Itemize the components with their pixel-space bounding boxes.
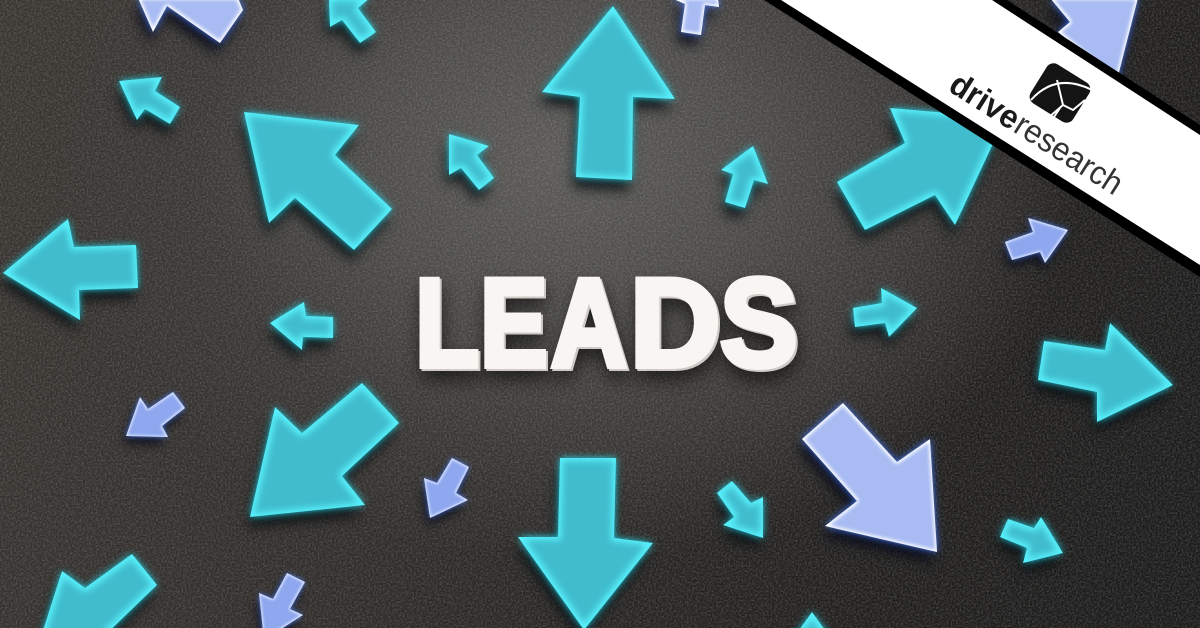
title: LEADS: A [551,254,627,393]
arrow: bottom-left cyan [40,554,157,628]
banner: drive research ribbon [764,0,1200,277]
title: LEADS: S [722,263,800,403]
title: LEADS: E [482,264,550,403]
title: LEADS: L [417,264,481,403]
arrow: top-left lavender [138,0,243,43]
arrow: small left cyan [270,302,333,350]
arrow: large right cyan [1038,323,1173,422]
logo wordmark [943,65,1130,202]
title: LEADS: A [553,264,629,403]
arrow: small right cyan [853,288,917,337]
title: LEADS: S [720,253,798,393]
title: LEADS: D [632,264,722,403]
arrow: top small lavender [671,0,719,35]
arrow: large left cyan [3,219,138,320]
arrow: small lower-right cyan [1000,517,1063,563]
title: LEADS: D [630,254,720,393]
arrow: small up-right lavender [1005,218,1068,263]
title: LEADS: S [722,255,800,395]
arrow: top-right lavender [1050,0,1138,80]
arrow: large up cyan [542,6,675,180]
arrow: small down-left lavender [126,392,185,437]
title: LEADS: E [482,256,550,395]
title: LEADS: L [417,256,481,395]
title: LEADS: L [415,254,479,393]
arrow: large down cyan [518,458,653,628]
title: LEADS [415,253,800,403]
arrow: top small cyan [329,0,376,43]
title: LEADS: E [480,254,548,393]
arrow: large down-left cyan [250,383,399,517]
title: LEADS: A [553,256,629,395]
logo wordmark: drive [943,65,1027,137]
logo icon [1027,60,1093,126]
arrow: bottom small lavender [259,573,305,628]
arrow: bottom edge cyan [792,612,832,628]
arrow: large up-left cyan [244,112,392,250]
arrow: centre small down-left lavender [424,458,469,518]
title: LEADS: D [632,256,722,395]
arrow: centre small up cyan [721,146,768,208]
logo wordmark: research [1008,106,1130,202]
arrow: large up-right cyan [837,108,1005,230]
arrow: small up-left cyan [119,77,180,124]
arrow: small down-right cyan [717,481,763,538]
arrow: large down-right lavender [802,403,937,552]
arrow: centre small up-left cyan [449,134,494,190]
